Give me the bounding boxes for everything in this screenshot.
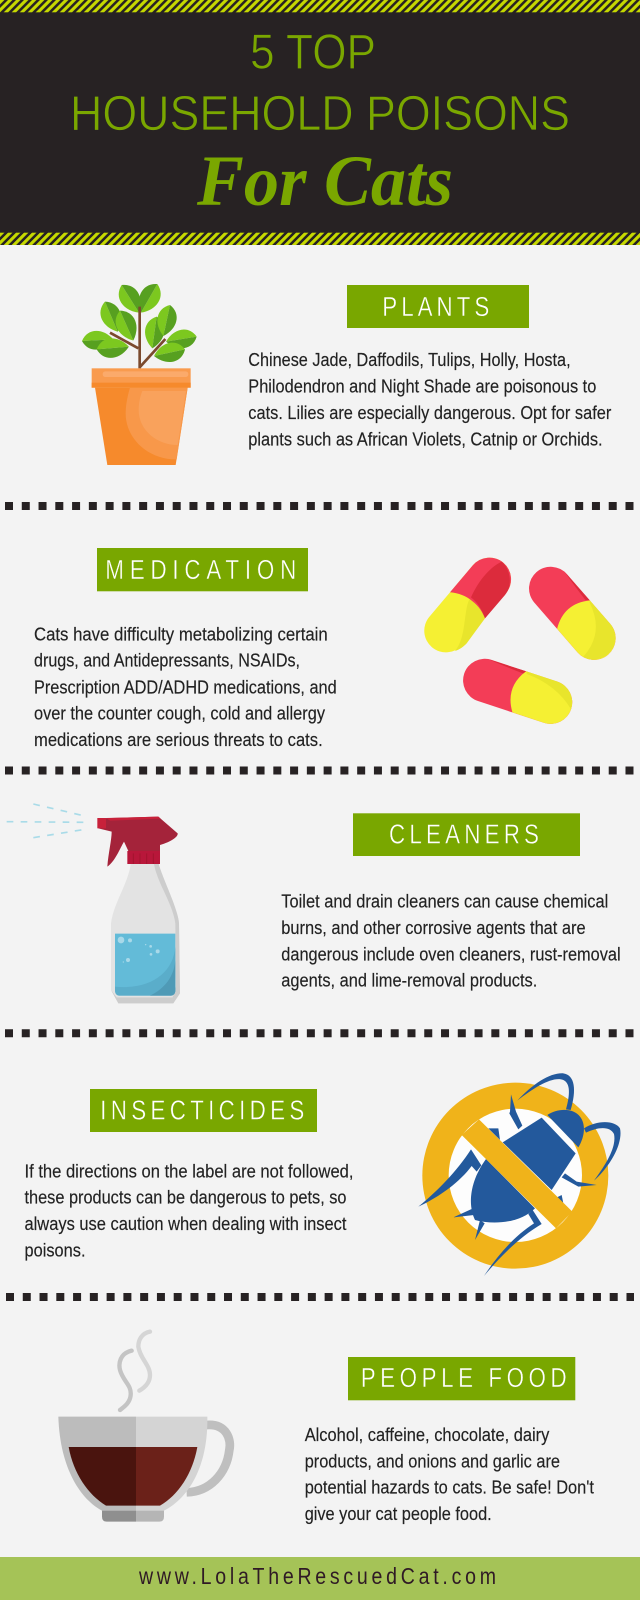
text block: plants: Chinese Jade, Daffodils, Tulips, Holly, Hosta, bbox=[248, 350, 571, 370]
text block: plants: cats. Lilies are especially dangerous. Opt for safer bbox=[248, 403, 611, 423]
icon: coffee cup bbox=[58, 1332, 230, 1522]
heading: insecticides bbox=[90, 1089, 317, 1132]
text block: cleaners: burns, and other corrosive agents that are bbox=[281, 918, 586, 938]
heading: plants bbox=[347, 285, 529, 328]
icon: spray bottle bbox=[7, 804, 180, 1003]
text block: insecticides: always use caution when dealing with insect bbox=[24, 1214, 346, 1234]
text block: people food: Alcohol, caffeine, chocolate, dairy bbox=[305, 1425, 549, 1445]
text block: insecticides: If the directions on the label are not followed, bbox=[24, 1161, 354, 1181]
title line: HOUSEHOLD POISONS: HOUSEHOLD POISONS bbox=[70, 86, 570, 141]
text block: medication bbox=[34, 625, 337, 750]
text block: insecticides: poisons. bbox=[24, 1241, 86, 1261]
panel: cleaners bbox=[7, 804, 621, 1003]
heading: cleaners bbox=[353, 813, 580, 856]
text block: plants: Philodendron and Night Shade are poisonous to bbox=[248, 377, 596, 397]
footer website: www.LolaTheRescuedCat.com bbox=[138, 1564, 496, 1589]
text block: plants: plants such as African Violets, Catnip or Orchids. bbox=[248, 429, 603, 449]
header banner bbox=[0, 0, 640, 245]
text block: medication: drugs, and Antidepressants, NSAIDs, bbox=[34, 651, 300, 671]
text block: people food bbox=[305, 1425, 594, 1524]
panel: medication bbox=[34, 548, 625, 750]
panel: people food bbox=[58, 1332, 594, 1524]
heading: people food: PEOPLE FOOD bbox=[361, 1363, 567, 1394]
heading: cleaners: CLEANERS bbox=[389, 819, 539, 850]
panel: plants bbox=[82, 279, 611, 465]
heading: insecticides: INSECTICIDES bbox=[100, 1095, 304, 1126]
title line: For Cats: For Cats bbox=[196, 141, 453, 221]
text block: people food: products, and onions and garlic are bbox=[305, 1451, 560, 1471]
text block: insecticides bbox=[24, 1161, 354, 1261]
icon: potted plant bbox=[82, 279, 198, 465]
text block: medication: over the counter cough, cold and allergy bbox=[34, 703, 325, 723]
title line: 5 TOP: 5 TOP bbox=[250, 24, 376, 79]
heading: medication: MEDICATION bbox=[105, 555, 296, 586]
panel: insecticides bbox=[24, 1073, 621, 1276]
text block: people food: give your cat people food. bbox=[305, 1504, 492, 1524]
footer bbox=[0, 1557, 640, 1600]
text block: cleaners: Toilet and drain cleaners can cause chemical bbox=[281, 891, 608, 911]
text block: people food: potential hazards to cats. Be safe! Don't bbox=[305, 1478, 594, 1498]
heading: people food bbox=[348, 1357, 575, 1400]
icon: no bugs sign bbox=[418, 1073, 621, 1276]
heading: medication bbox=[97, 548, 308, 591]
icon: capsules bbox=[415, 549, 625, 730]
heading: plants: PLANTS bbox=[382, 292, 489, 323]
text block: medication: Prescription ADD/ADHD medications, and bbox=[34, 677, 337, 697]
text block: medication: medications are serious threats to cats. bbox=[34, 730, 323, 750]
text block: medication: Cats have difficulty metabolizing certain bbox=[34, 625, 328, 645]
text block: cleaners: agents, and lime-removal products. bbox=[281, 971, 537, 991]
text block: plants bbox=[248, 350, 611, 449]
text block: cleaners bbox=[281, 891, 621, 991]
text block: insecticides: these products can be dangerous to pets, so bbox=[24, 1188, 346, 1208]
